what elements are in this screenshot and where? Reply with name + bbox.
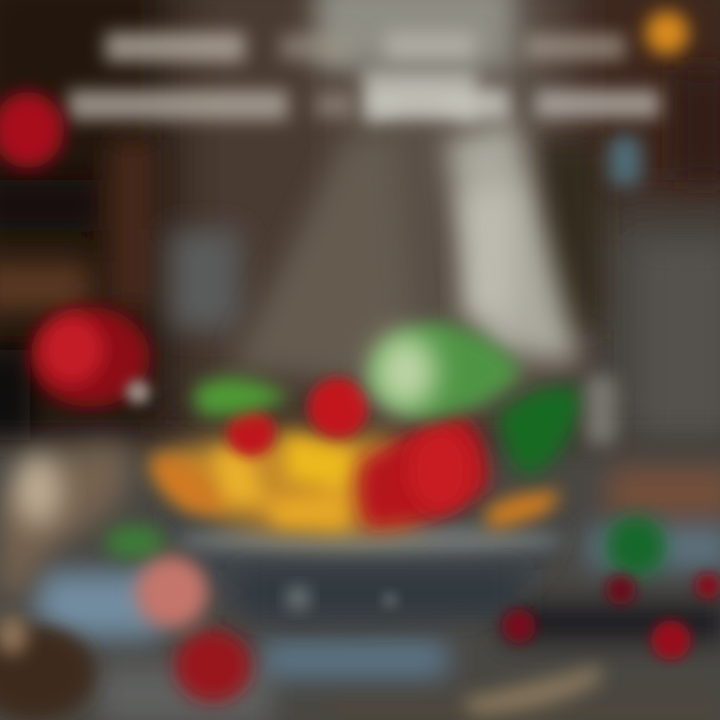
fruit: warm base of the bowl contents [155,433,420,532]
cloth: hanging towel shapes [230,0,580,385]
jar: pale blue glass [608,135,642,187]
heading: blurred title bars [68,32,660,120]
fruit: red peppers [358,415,488,528]
tomatoes: on top of the fruit [227,378,368,456]
apple: middle left [30,307,150,407]
light: orange glow [645,11,689,55]
greens: lettuce and leaves [105,322,666,576]
glass: behind bowl right [585,375,617,445]
strawberries: foreground [136,556,251,702]
fruit: orange and yellow slices [150,435,562,530]
crumbs: pale pieces on table [460,665,602,716]
berries: scattered on table [502,573,720,660]
mushrooms: left foreground [0,445,129,720]
bowl: grey stoneware [165,510,565,630]
table surface [0,445,720,720]
apple: upper left [0,92,64,168]
